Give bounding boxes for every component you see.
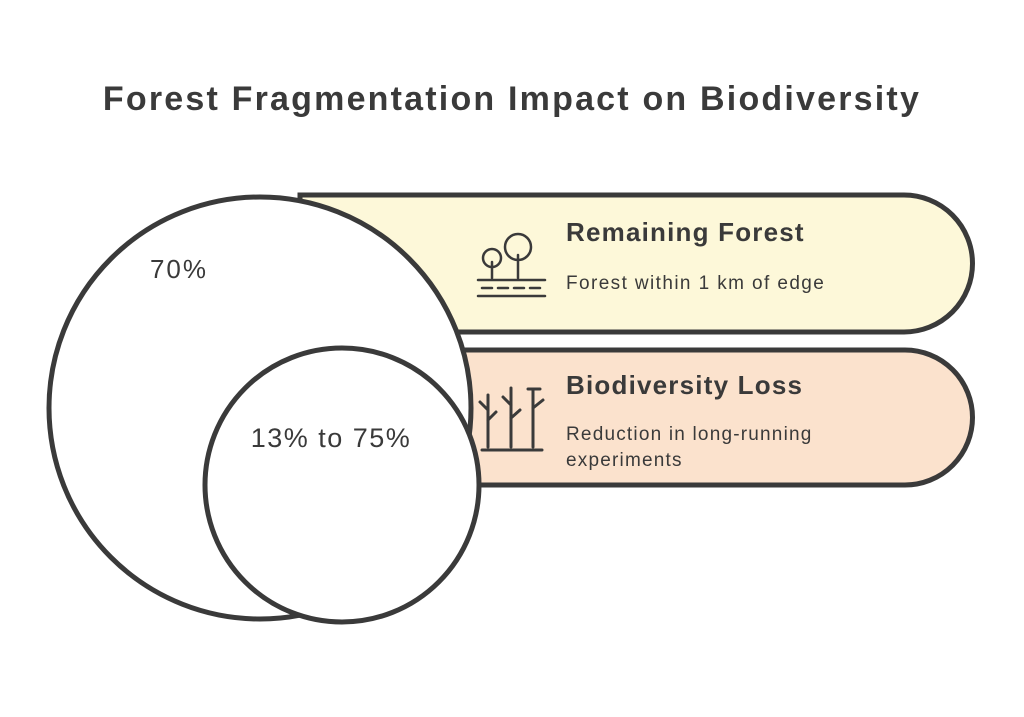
panel: biodiversity loss bar — [370, 350, 972, 485]
panel: remaining forest bar — [300, 195, 972, 332]
big circle: 70% — [49, 197, 471, 619]
icon: dead trees — [480, 388, 543, 450]
text: biodiversity loss desc: experiments — [566, 450, 683, 471]
text: biodiversity loss desc: Reduction in long-running — [566, 424, 813, 445]
big circle: 70%: 70% — [150, 254, 208, 284]
title: Forest Fragmentation Impact on Biodiversity — [103, 80, 921, 118]
heading: biodiversity loss: Biodiversity Loss — [566, 370, 803, 400]
small circle: 13% to 75%: 13% to 75% — [251, 423, 411, 453]
text: remaining forest desc: Forest within 1 km of edge — [566, 273, 825, 294]
small circle: 13% to 75% — [205, 348, 479, 622]
icon: trees — [478, 234, 545, 296]
heading: remaining forest: Remaining Forest — [566, 217, 805, 247]
